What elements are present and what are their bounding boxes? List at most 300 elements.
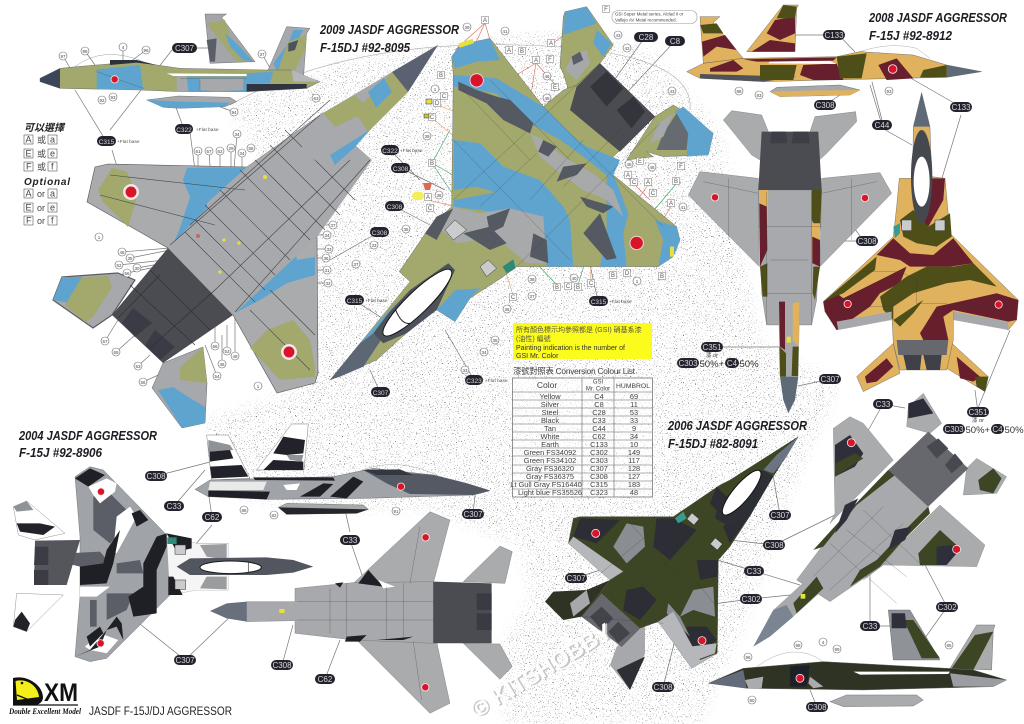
left stabilator xyxy=(53,273,135,328)
colour table: 128 xyxy=(628,464,640,473)
part number callouts: 42 xyxy=(624,46,630,51)
mascot head xyxy=(13,677,43,705)
colour table: C4 xyxy=(594,392,604,401)
top stabilator xyxy=(545,580,610,620)
option legend xyxy=(24,122,70,226)
colour table: Yellow xyxy=(539,392,561,401)
aircraft: 2008 desert underside xyxy=(688,111,892,413)
stabilators xyxy=(723,111,857,160)
part number callouts: 53 xyxy=(135,364,141,369)
titles: F-15J #92-8906 xyxy=(19,446,103,460)
part number callouts: 41 xyxy=(680,205,686,210)
colour table: HUMBROL xyxy=(616,383,650,390)
upper stabilator xyxy=(13,501,65,540)
part number callouts: 53 xyxy=(224,349,230,354)
colour code labels: C315 xyxy=(591,299,607,306)
colour code labels: C302 xyxy=(741,595,761,604)
paint letter tags: A xyxy=(626,173,630,179)
paint letter tags: B xyxy=(430,161,434,167)
option legend: 或 xyxy=(37,134,46,145)
fuel tank xyxy=(830,695,923,707)
right stabilator xyxy=(627,105,713,160)
flat base notes: +Flat base xyxy=(196,127,219,133)
part number callouts: 35 xyxy=(403,227,409,232)
engine nozzles xyxy=(477,593,492,630)
option legend: e xyxy=(50,148,55,158)
colour code labels: C308 xyxy=(807,703,827,712)
right stabilator xyxy=(963,458,1007,495)
fuselage xyxy=(247,582,433,643)
paint letter tags: B xyxy=(674,179,678,185)
colour table: Lt Gull Gray FS16440 xyxy=(510,480,582,489)
part number callouts: 62 xyxy=(217,149,223,154)
canopy xyxy=(911,130,932,223)
national markings xyxy=(470,74,643,250)
part number callouts: 43 xyxy=(669,89,675,94)
part number callouts: 38 xyxy=(529,277,535,282)
white camouflage xyxy=(80,478,137,653)
part number callouts: 82 xyxy=(271,513,277,518)
logo xyxy=(8,677,82,716)
black and white patches xyxy=(335,570,413,642)
engine nozzles xyxy=(770,132,810,143)
colour code labels: C323 xyxy=(466,378,482,385)
option legend: a xyxy=(50,188,55,198)
option legend: or xyxy=(37,203,45,213)
part number callouts: 4 xyxy=(822,640,825,645)
part number callouts: 33 xyxy=(326,247,332,252)
colour code labels: C44 xyxy=(875,121,890,130)
colour code labels: C33 xyxy=(343,536,358,545)
part number callouts: 54 xyxy=(214,374,220,379)
engine nozzles xyxy=(927,438,963,473)
colour table: C302 xyxy=(590,448,608,457)
colour table: 9 xyxy=(632,424,636,433)
watermark: © KITSHOBBY xyxy=(466,618,616,723)
paint letter tags xyxy=(424,6,684,301)
colour code labels: C351 xyxy=(702,343,722,352)
colour code labels: C33 xyxy=(747,567,762,576)
colour code labels: C33 xyxy=(863,622,878,631)
maroon camouflage xyxy=(823,178,1018,340)
part number callouts: 94 xyxy=(231,110,237,115)
paint letter tags: A xyxy=(646,180,650,186)
far tail fin xyxy=(257,424,308,470)
flat base notes: +Flat base xyxy=(485,378,508,384)
fuel tank xyxy=(278,503,368,514)
paint letter tags: A xyxy=(507,48,511,54)
national markings xyxy=(422,534,429,691)
stabilators xyxy=(463,546,512,679)
part number callouts: 1 xyxy=(257,384,260,389)
part number callouts: 34 xyxy=(234,132,240,137)
colour code labels: C307 xyxy=(175,44,195,53)
intake vents xyxy=(445,220,497,277)
part number callouts: 1 xyxy=(98,235,101,240)
colour code labels: C133 xyxy=(824,31,844,40)
trailing edge flaps xyxy=(837,312,1008,330)
upper wing xyxy=(830,417,893,523)
colour code labels: C62 xyxy=(318,675,333,684)
colour code labels: C307 xyxy=(463,510,483,519)
forward fuselage xyxy=(753,573,827,647)
nose xyxy=(913,93,930,127)
mix ratio notes: 50% xyxy=(1004,425,1024,436)
colour table: Color xyxy=(537,380,557,390)
decal numbers xyxy=(458,39,674,257)
part number callouts: 93 xyxy=(110,95,116,100)
national markings xyxy=(592,529,706,645)
colour code labels: C308 xyxy=(272,661,292,670)
colour table: 69 xyxy=(630,392,638,401)
colour table: C315 xyxy=(590,480,608,489)
top stabilator xyxy=(560,7,613,95)
yellow note: (油性) 編號 xyxy=(516,334,551,343)
colour code labels: C322 xyxy=(176,127,192,134)
part number callouts: 43 xyxy=(615,33,621,38)
olive camouflage xyxy=(823,210,997,327)
colour code labels: C307 xyxy=(373,390,389,397)
fuselage xyxy=(758,190,822,325)
paint letter tags: C xyxy=(632,180,637,186)
rear block xyxy=(888,432,968,507)
part number callouts: 37 xyxy=(353,262,359,267)
rear block xyxy=(433,582,492,643)
rear fuselage xyxy=(34,540,80,585)
part number callouts: 45 xyxy=(626,162,632,167)
part number callouts: 1 xyxy=(434,87,437,92)
part number callouts: 33 xyxy=(371,243,377,248)
wings xyxy=(353,512,450,713)
airframe xyxy=(568,437,798,668)
national marking xyxy=(111,76,118,83)
intake vents xyxy=(902,220,945,231)
fuselage xyxy=(195,468,490,499)
panel lines xyxy=(703,178,877,325)
yellow note: 所有顏色標示均參照都是 (GSI) 硝基系漆 xyxy=(516,325,642,334)
colour table: 漆號對照表 Conversion Colour List xyxy=(513,366,636,376)
upper wing xyxy=(87,113,330,250)
part number callouts: 46 xyxy=(119,250,125,255)
national markings xyxy=(124,185,296,359)
colour code labels: C307 xyxy=(175,656,195,665)
lower stabilator xyxy=(610,625,645,690)
logo: Double Excellent Model xyxy=(8,707,82,716)
part number callouts: 48 xyxy=(232,354,238,359)
colour code labels: C315 xyxy=(99,139,115,146)
grey camouflage xyxy=(433,133,623,263)
engine nozzles xyxy=(122,308,175,360)
option legend: or xyxy=(37,189,45,199)
part number callouts: 31 xyxy=(324,268,330,273)
option legend: 可以選擇 xyxy=(24,122,66,134)
part number callouts: 93 xyxy=(886,89,892,94)
colour table: C323 xyxy=(590,488,608,497)
colour code labels: C307 xyxy=(566,574,586,583)
colour table: 149 xyxy=(628,448,640,457)
flat base notes xyxy=(117,127,632,384)
lower wing xyxy=(863,505,985,580)
colour table: C33 xyxy=(592,416,606,425)
mix ratio notes: 50%+ xyxy=(700,359,725,370)
colour code labels: C322 xyxy=(382,148,398,155)
part number callouts: 61 xyxy=(195,149,201,154)
paint letter tags: C xyxy=(430,115,435,121)
engine block xyxy=(897,340,948,370)
colour table: Gray FS36320 xyxy=(526,464,574,473)
colour table: 127 xyxy=(628,472,640,481)
option legend: A xyxy=(26,134,32,144)
colour table: C303 xyxy=(590,456,608,465)
part number callouts: 56 xyxy=(124,271,130,276)
part number callouts: 63 xyxy=(313,96,319,101)
colour code labels: C308 xyxy=(815,101,835,110)
colour table: Green FS34102 xyxy=(524,456,576,465)
colour code labels: C303 xyxy=(944,425,964,434)
near tail fin xyxy=(267,27,310,80)
part number callouts: 56 xyxy=(140,380,146,385)
option legend: f xyxy=(51,216,54,226)
part number callouts: 45 xyxy=(544,96,550,101)
colour table: Black xyxy=(541,416,559,425)
mix ratio notes xyxy=(700,351,1024,436)
titles: 2004 JASDF AGGRESSOR xyxy=(18,429,157,443)
far tail fin xyxy=(205,14,255,63)
part number callouts: 92 xyxy=(99,98,105,103)
paint letter tags: B xyxy=(520,49,524,55)
paint letter tags: B xyxy=(439,73,443,79)
aircraft: 2008 desert upper view xyxy=(823,93,1018,392)
rear fuselage block xyxy=(112,248,233,363)
colour code labels: C133 xyxy=(951,103,971,112)
titles: 2006 JASDF AGGRESSOR xyxy=(667,419,807,433)
watermark: © KITSHOBBY xyxy=(468,618,618,723)
national markings xyxy=(847,439,961,553)
yellow note xyxy=(513,323,652,360)
part number callouts: 36 xyxy=(504,307,510,312)
part number callouts: 91 xyxy=(393,509,399,514)
rear fuselage xyxy=(758,132,822,190)
aircraft: 2006 green underside xyxy=(753,393,1007,647)
light wing edges xyxy=(568,537,717,668)
airframe xyxy=(330,38,680,380)
part number callouts: 34 xyxy=(324,233,330,238)
colour table: White xyxy=(541,432,559,441)
part number callouts: 33 xyxy=(462,368,468,373)
part number callouts: 96 xyxy=(143,48,149,53)
part number callouts: 96 xyxy=(745,655,751,660)
national marking xyxy=(796,674,804,682)
fuel tank xyxy=(147,96,237,108)
part number callouts: 52 xyxy=(116,263,122,268)
metal paint note xyxy=(612,10,697,24)
colour code labels: C62 xyxy=(205,513,220,522)
green panel xyxy=(503,259,516,273)
paint letter tags: A xyxy=(426,195,430,201)
part number callouts: 41 xyxy=(502,29,508,34)
paint letter tags: A xyxy=(549,41,553,47)
option legend: e xyxy=(50,202,55,212)
part number callouts: 30 xyxy=(134,266,140,271)
panel lines xyxy=(453,63,663,267)
colour code labels: C4 xyxy=(992,425,1003,434)
part number callouts: 99 xyxy=(834,647,840,652)
colour code labels: C351 xyxy=(968,408,988,417)
option legend: or xyxy=(37,216,45,226)
colour table: C308 xyxy=(590,472,608,481)
dark grey camouflage xyxy=(67,493,143,627)
paint letter tags: B xyxy=(660,274,664,280)
nose and canopy xyxy=(715,437,798,527)
colour table: Tan xyxy=(544,424,556,433)
part number callouts: 34 xyxy=(239,151,245,156)
paint letter tags: C xyxy=(589,281,594,287)
intake vents xyxy=(175,545,186,589)
colour code labels: C4 xyxy=(727,359,738,368)
option legend: a xyxy=(50,134,55,144)
part number callouts: 46 xyxy=(544,74,550,79)
paint letter tags: A xyxy=(669,201,673,207)
near tail fin xyxy=(950,625,995,670)
panel lines xyxy=(297,527,433,700)
part number callouts: 98 xyxy=(82,49,88,54)
paint letter tags: C xyxy=(428,206,433,212)
metal paint note: GSI Super Metal series, Alclad II or xyxy=(615,12,684,16)
mix ratio notes: 漆 or xyxy=(972,416,984,424)
lower stabilator xyxy=(152,347,207,428)
colour table: 53 xyxy=(630,408,638,417)
metal paint note: Vallejo AV Metal recommended. xyxy=(615,18,677,22)
option legend: Optional xyxy=(24,177,70,188)
aircraft: 2009 blue underside xyxy=(53,45,438,428)
flat base notes: +Flat base xyxy=(365,298,388,304)
flat base notes: +Flat base xyxy=(117,139,140,145)
option legend: 或 xyxy=(37,161,46,172)
colour table: C133 xyxy=(590,440,608,449)
paint letter tags: F xyxy=(604,7,608,13)
colour table: 117 xyxy=(628,456,640,465)
national markings xyxy=(844,300,1002,308)
colour table: Gray FS36375 xyxy=(526,472,574,481)
paint letter tags: B xyxy=(611,273,615,279)
far tail fin xyxy=(747,5,798,52)
blue camouflage xyxy=(437,38,680,322)
side stripes xyxy=(759,190,822,300)
part number callouts: 85 xyxy=(946,643,952,648)
paint letter tags: A xyxy=(483,18,487,24)
nose section xyxy=(778,302,800,413)
part number callouts: 86 xyxy=(241,508,247,513)
paint letter tags: E xyxy=(638,159,642,165)
part number callouts: 39 xyxy=(464,25,470,30)
part number callouts: 4 xyxy=(122,45,125,50)
upper stabilator xyxy=(907,393,942,433)
flat base notes: +Flat base xyxy=(400,148,423,154)
colour table: Green FS34092 xyxy=(524,448,576,457)
national marking xyxy=(888,65,897,73)
paint letter tags: C xyxy=(651,191,656,197)
fuselage xyxy=(708,662,1007,690)
colour table: Steel xyxy=(542,408,559,417)
titles xyxy=(18,11,1007,460)
option legend: 或 xyxy=(37,148,46,159)
part number callouts: 32 xyxy=(325,281,331,286)
part number callouts: 1 xyxy=(636,279,639,284)
titles: F-15J #92-8912 xyxy=(869,29,952,43)
titles: 2009 JASDF AGGRESSOR xyxy=(319,23,459,37)
part number callouts: 98 xyxy=(795,643,801,648)
engine nozzles xyxy=(590,72,645,128)
paint letter tags: D xyxy=(435,101,440,107)
paint letter tags: F xyxy=(679,164,683,170)
colour code labels: C33 xyxy=(167,502,182,511)
part number callouts: 58 xyxy=(248,146,254,151)
colour code labels: C8 xyxy=(670,37,681,46)
colour table: Earth xyxy=(541,440,559,449)
aircraft: 2006 green side view xyxy=(708,610,1007,707)
colour code labels: C308 xyxy=(764,541,784,550)
green patches xyxy=(835,435,958,565)
dark camouflage xyxy=(573,487,752,653)
speckled background xyxy=(205,30,840,724)
fuselage xyxy=(687,52,982,82)
colour code labels: C33 xyxy=(876,400,891,409)
colour table: Light blue FS35526 xyxy=(518,488,582,497)
colour code labels: C315 xyxy=(347,298,363,305)
colour table: Silver xyxy=(541,400,560,409)
paint letter tags: E xyxy=(553,85,557,91)
fuel tank xyxy=(770,85,860,97)
wings xyxy=(688,172,892,267)
part number callouts: 35 xyxy=(492,338,498,343)
fuselage centre xyxy=(100,100,372,370)
paint letter tags: B xyxy=(576,285,580,291)
part number callouts: 65 xyxy=(113,350,119,355)
part number callouts: 83 xyxy=(756,93,762,98)
paint letter tags: B xyxy=(555,285,559,291)
colour code labels: C303 xyxy=(678,359,698,368)
colour code labels: C308 xyxy=(393,166,409,173)
rear fuselage xyxy=(570,63,655,152)
colour table: C62 xyxy=(592,432,606,441)
colour table: C44 xyxy=(592,424,606,433)
part number callouts: 67 xyxy=(102,339,108,344)
paint letter tags: D xyxy=(625,271,630,277)
colour code labels: C302 xyxy=(937,603,957,612)
colour table: 34 xyxy=(630,432,638,441)
part number callouts: 37 xyxy=(330,223,336,228)
plane arcs xyxy=(230,45,690,110)
grey camouflage xyxy=(613,523,715,637)
colour table: C8 xyxy=(594,400,604,409)
option legend: F xyxy=(26,162,32,172)
aircraft: 2004 snow underside xyxy=(210,512,512,713)
part number callouts: 34 xyxy=(481,350,487,355)
fuselage xyxy=(40,62,320,92)
radome xyxy=(210,602,247,622)
part number callouts: 36 xyxy=(219,362,225,367)
colour code labels: C307 xyxy=(770,511,790,520)
yellow note: GSI Mr. Color xyxy=(516,353,559,360)
part number callouts: 29 xyxy=(228,146,234,151)
paint letter tags: A xyxy=(534,58,538,64)
engine block xyxy=(582,593,640,647)
aircraft: 2009 blue side view xyxy=(40,14,320,108)
black camouflage xyxy=(75,468,192,657)
part number callouts: 37 xyxy=(529,294,535,299)
part number callouts: 88 xyxy=(736,89,742,94)
logo: XM xyxy=(44,679,78,707)
